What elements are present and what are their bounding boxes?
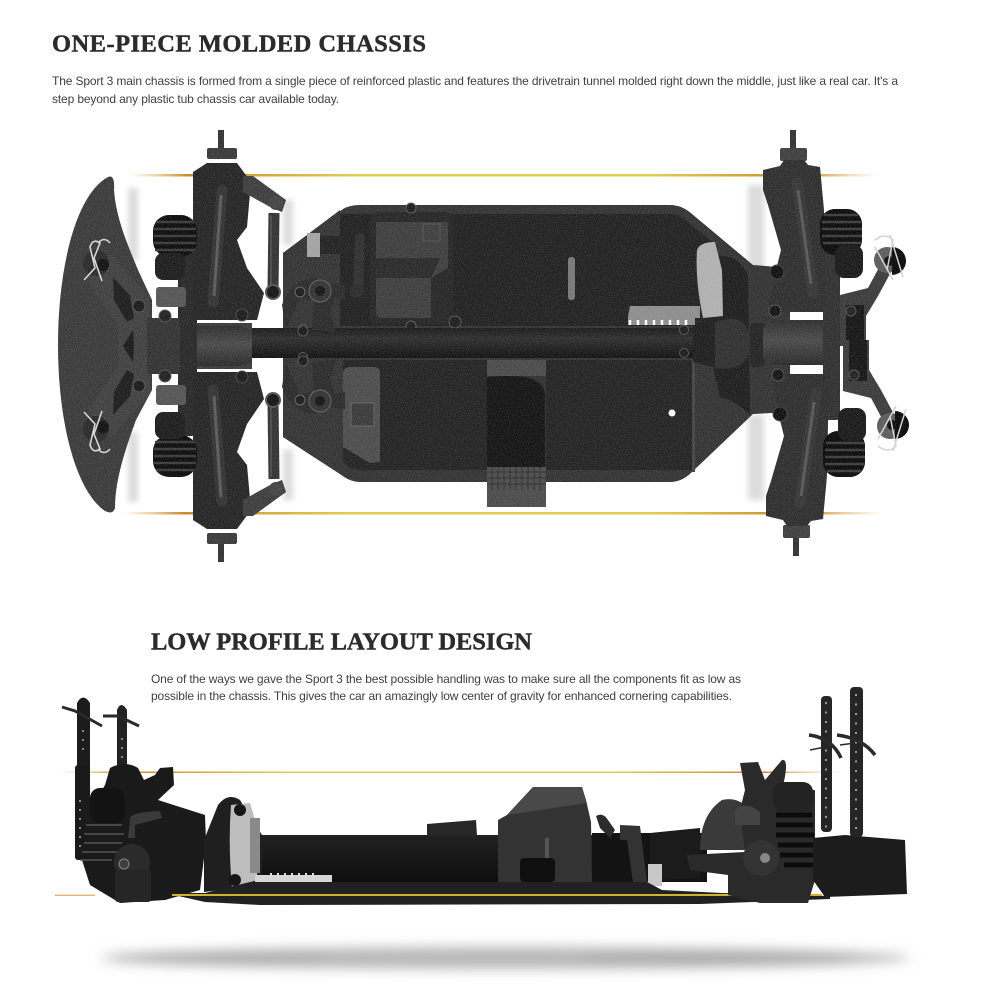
rear corner lower bbox=[766, 340, 909, 556]
steering servo link bbox=[307, 233, 364, 298]
text block: layout description: One of the ways we gave the Sport 3 the best possible handling was to make sure all the components fit as low as bbox=[151, 672, 741, 686]
spur gear metal mount bbox=[697, 242, 723, 318]
right motor and bracket bbox=[592, 815, 707, 886]
tub molded highlight bbox=[568, 257, 575, 300]
battery side pad bbox=[343, 367, 380, 463]
velcro battery strap bbox=[487, 360, 546, 507]
steering pot screws bbox=[406, 203, 461, 331]
servo box side bbox=[498, 787, 592, 882]
rear shock tower plate bbox=[823, 250, 840, 420]
spur gear bell with silver mount bbox=[204, 797, 262, 892]
tub light dot hole bbox=[668, 410, 676, 416]
gold guide line: top view lower bbox=[122, 512, 882, 514]
rear corner upper bbox=[763, 130, 906, 346]
servo box cover bbox=[370, 212, 453, 324]
front corner upper bbox=[83, 130, 345, 346]
text block: chassis description: The Sport 3 main chassis is formed from a single piece of reinforced plastic and features the drivetrain tunnel molded right down the middle, just like a real car. It's a bbox=[52, 74, 898, 88]
text block: layout description: possible in the chassis. This gives the car an amazingly low center of gravity for enhanced cornering capabilities. bbox=[151, 689, 732, 703]
tube screws bbox=[298, 324, 688, 362]
drivetrain tunnel side bbox=[262, 835, 607, 882]
drivetrain tunnel tube bbox=[250, 328, 695, 358]
soft drop shadows: top view bbox=[128, 185, 764, 502]
side view chassis car bbox=[55, 687, 907, 905]
left suspension assembly bbox=[80, 764, 206, 903]
gold guide line: top view upper bbox=[128, 174, 878, 176]
right suspension assembly bbox=[687, 760, 815, 903]
chassis base plate bbox=[165, 882, 830, 905]
motor rack bbox=[255, 873, 332, 883]
front shock tower plate bbox=[178, 252, 197, 436]
chassis tub bbox=[283, 205, 790, 482]
heading: one-piece molded chassis: ONE-PIECE MOLDED CHASSIS bbox=[52, 30, 426, 58]
top view chassis car bbox=[58, 130, 909, 562]
text block: layout description bbox=[151, 672, 741, 703]
ground shadow bbox=[100, 947, 910, 969]
text block: chassis description bbox=[52, 74, 898, 106]
gold guide line: side view lower bbox=[55, 894, 822, 896]
right body posts bbox=[809, 687, 875, 837]
left body posts bbox=[62, 698, 139, 860]
battery strap tab bbox=[427, 820, 477, 836]
rear differential housing bbox=[763, 320, 823, 365]
rear gearbox bell bbox=[693, 256, 765, 415]
text block: chassis description: step beyond any plastic tub chassis car available today. bbox=[52, 92, 339, 106]
heading: low profile layout design: LOW PROFILE LAYOUT DESIGN bbox=[151, 628, 532, 656]
motor plate rack bbox=[628, 306, 700, 325]
front corner lower bbox=[83, 346, 345, 562]
right foam bumper side bbox=[813, 835, 907, 897]
gold guide line: side view upper bbox=[58, 772, 843, 773]
front gearbox housing bbox=[197, 326, 252, 366]
front bumper foam wing bbox=[58, 177, 152, 512]
